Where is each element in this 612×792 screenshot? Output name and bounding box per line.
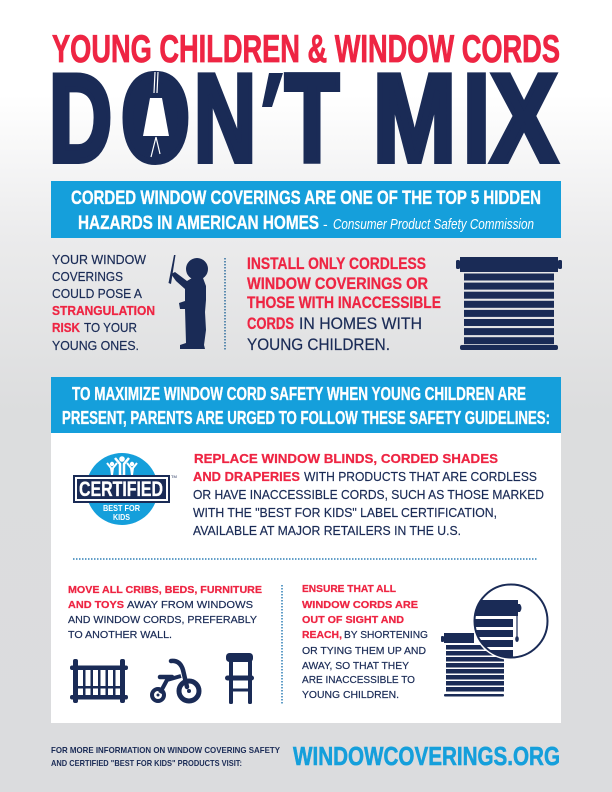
text block: move cribs and furniture: AND WINDOW CORDS, PREFERABLY xyxy=(68,614,257,626)
headline: don't mix: I xyxy=(463,50,490,188)
text block: install only cordless: THOSE WITH INACCESSIBLE xyxy=(247,294,441,312)
icon: crib xyxy=(70,659,128,703)
headline: don't mix: T xyxy=(285,50,339,188)
banner: top 5 hidden hazards: HAZARDS IN AMERICAN HOMES xyxy=(78,213,319,234)
text block: strangulation risk: TO YOUR xyxy=(84,320,137,335)
headline: don't mix: N xyxy=(194,50,256,188)
headline: don't mix xyxy=(49,50,557,188)
text block: strangulation risk: COULD POSE A xyxy=(52,286,142,301)
icon: window cord tassel in the O xyxy=(134,72,178,157)
icon: child silhouette holding a cord xyxy=(168,255,208,349)
text block: move cribs and furniture: AWAY FROM WINDOWS xyxy=(127,599,253,611)
text block: strangulation risk: STRANGULATION xyxy=(52,303,155,318)
banner: top 5 hidden hazards: - xyxy=(323,216,328,232)
icon: window blinds xyxy=(456,257,562,350)
text block: strangulation risk: RISK xyxy=(52,320,81,335)
icon: three children figures xyxy=(107,456,137,476)
banner: top 5 hidden hazards: Consumer Product Safety Commission xyxy=(333,217,534,233)
icon: chair xyxy=(225,653,254,704)
text block: ensure cords are out of reach: WINDOW CORDS ARE xyxy=(302,599,418,611)
text block: strangulation risk: YOUR WINDOW xyxy=(52,252,147,267)
text block: ensure cords are out of reach: REACH, xyxy=(302,629,342,641)
text block: ensure cords are out of reach: BY SHORTENING xyxy=(344,629,428,641)
text block: move cribs and furniture: MOVE ALL CRIBS, BEDS, FURNITURE xyxy=(68,584,262,596)
divider: vertical dots xyxy=(224,258,226,350)
text block: install only cordless: INSTALL ONLY CORDLESS xyxy=(247,255,426,273)
text block: ensure cords are out of reach: ARE INACCESSIBLE TO xyxy=(302,674,415,686)
text block: install only cordless: CORDS xyxy=(247,315,294,333)
text block: move cribs and furniture: AND TOYS xyxy=(68,599,124,611)
text block: replace window blinds: WITH PRODUCTS THAT ARE CORDLESS xyxy=(304,469,537,484)
text block: replace window blinds: AVAILABLE AT MAJOR RETAILERS IN THE U.S. xyxy=(193,523,461,538)
headline: don't mix: D xyxy=(49,50,112,188)
text block: replace window blinds xyxy=(193,451,544,538)
panel: guidelines xyxy=(51,433,561,723)
text block: strangulation risk xyxy=(52,252,155,353)
footer: more information: FOR MORE INFORMATION ON WINDOW COVERING SAFETY xyxy=(51,745,280,755)
text block: move cribs and furniture: TO ANOTHER WALL. xyxy=(68,629,172,641)
headline: don't mix: M xyxy=(373,50,456,188)
text block: install only cordless xyxy=(247,255,441,354)
text block: ensure cords are out of reach: AWAY, SO THAT THEY xyxy=(302,660,409,672)
headline: don't mix: X xyxy=(491,50,557,188)
text block: replace window blinds: REPLACE WINDOW BLINDS, CORDED SHADES xyxy=(194,451,498,466)
text block: replace window blinds: AND DRAPERIES xyxy=(193,469,300,484)
logo: certified best for kids xyxy=(74,453,177,525)
text block: install only cordless: WINDOW COVERINGS OR xyxy=(247,275,428,293)
icon: tricycle xyxy=(152,661,199,701)
text block: replace window blinds: WITH THE "BEST FOR KIDS" LABEL CERTIFICATION, xyxy=(193,505,497,520)
text block: ensure cords are out of reach: OUT OF SIGHT AND xyxy=(302,614,404,626)
banner: top 5 hidden hazards xyxy=(51,181,561,238)
text block: move cribs and furniture xyxy=(68,584,262,641)
text block: ensure cords are out of reach: ENSURE THAT ALL xyxy=(302,583,397,595)
logo: certified best for kids: TM xyxy=(171,474,177,479)
text block: ensure cords are out of reach xyxy=(302,583,428,701)
headline: don't mix: O xyxy=(121,50,190,188)
icon: blinds with magnified cord detail xyxy=(441,582,550,696)
footer: more information xyxy=(51,745,280,768)
text block: install only cordless: IN HOMES WITH xyxy=(299,315,422,333)
banner: safety guidelines xyxy=(51,377,561,433)
logo: certified best for kids: KIDS xyxy=(113,512,130,522)
text block: replace window blinds: OR HAVE INACCESSIBLE CORDS, SUCH AS THOSE MARKED xyxy=(193,487,544,502)
footer: more information: AND CERTIFIED "BEST FOR KIDS" PRODUCTS VISIT: xyxy=(51,758,242,768)
text block: ensure cords are out of reach: YOUNG CHILDREN. xyxy=(302,689,399,701)
logo: certified best for kids: CERTIFIED xyxy=(79,478,163,501)
text block: strangulation risk: COVERINGS xyxy=(52,269,123,284)
logo: certified best for kids: BEST FOR xyxy=(103,503,140,513)
text block: install only cordless: YOUNG CHILDREN. xyxy=(247,336,390,354)
text block: strangulation risk: YOUNG ONES. xyxy=(52,338,139,353)
text block: ensure cords are out of reach: OR TYING THEM UP AND xyxy=(302,645,426,657)
